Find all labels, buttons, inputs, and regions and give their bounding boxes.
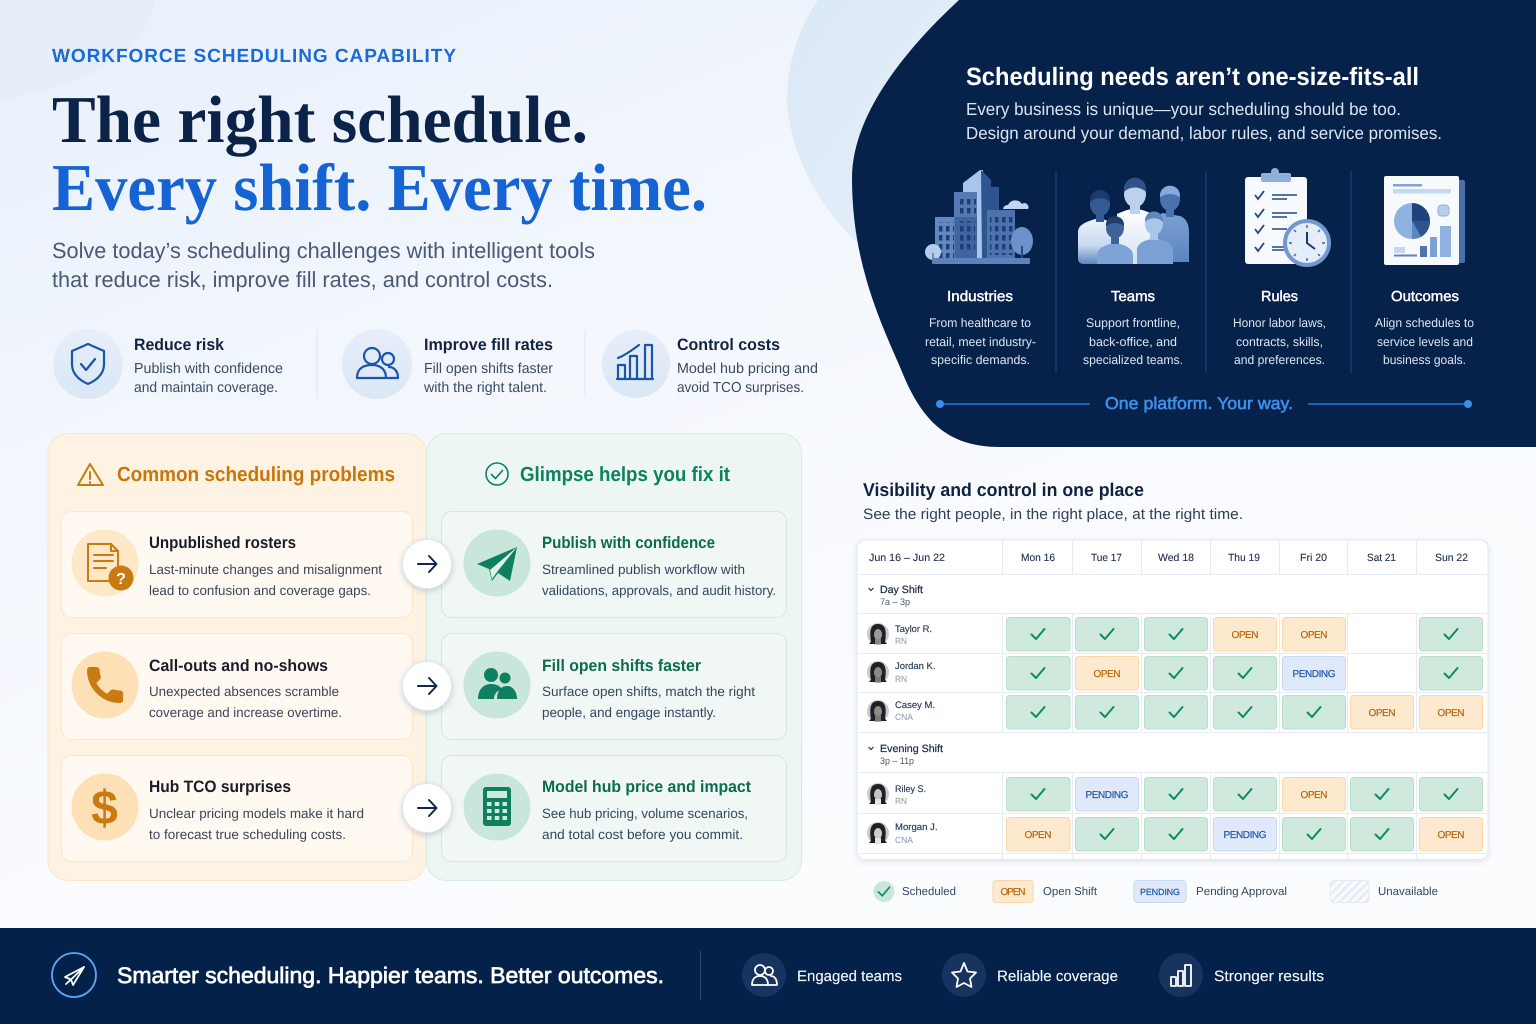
icon: paper plane in ring bbox=[52, 953, 96, 997]
legend: unavailable bbox=[1330, 880, 1438, 902]
row: Casey M. bbox=[867, 696, 1482, 729]
footer item: stronger results: Stronger results bbox=[1214, 968, 1324, 985]
card: publish with confidence: Streamlined publish workflow with bbox=[542, 562, 745, 577]
card: publish with confidence: validations, approvals, and audit history. bbox=[542, 583, 776, 598]
icon: check circle bbox=[486, 463, 508, 485]
subtitle bbox=[52, 238, 595, 292]
card: publish with confidence bbox=[442, 512, 786, 618]
text: outcomes description: business goals. bbox=[1383, 353, 1466, 367]
card: model hub price: Model hub price and impact bbox=[542, 778, 751, 796]
card: hub tco surprises: Unclear pricing models make it hard bbox=[149, 806, 364, 821]
card: model hub price bbox=[442, 756, 786, 862]
row: Taylor R.: OPEN bbox=[1232, 630, 1258, 641]
benefit: control costs: avoid TCO surprises. bbox=[677, 380, 804, 396]
icon: phone bbox=[72, 652, 138, 718]
legend: pending approval: Pending Approval bbox=[1196, 886, 1287, 898]
card: call-outs and no-shows bbox=[62, 634, 412, 740]
legend bbox=[874, 880, 1438, 902]
icon: people bbox=[464, 652, 530, 718]
table header: Sun 22 bbox=[1435, 552, 1468, 564]
table header: Sat 21 bbox=[1367, 552, 1396, 564]
heading: visibility and control: Visibility and control in one place bbox=[863, 479, 1144, 500]
row: Morgan J.: OPEN bbox=[1438, 830, 1464, 841]
row: Riley S. bbox=[867, 778, 1482, 811]
card: hub tco surprises: Hub TCO surprises bbox=[149, 778, 291, 796]
benefit: reduce risk: and maintain coverage. bbox=[134, 380, 278, 396]
column: rules bbox=[1233, 168, 1329, 367]
section: evening shift: 3p – 11p bbox=[880, 756, 914, 767]
text: scheduling needs intro bbox=[966, 99, 1442, 143]
legend: open shift bbox=[993, 880, 1098, 902]
heading: common problems: Common scheduling problems bbox=[117, 463, 395, 486]
benefit: control costs: Control costs bbox=[677, 336, 780, 354]
icon: calculator bbox=[464, 774, 530, 840]
avatar bbox=[867, 661, 889, 683]
heading: glimpse helps: Glimpse helps you fix it bbox=[520, 463, 730, 486]
avatar bbox=[867, 623, 889, 645]
row: Morgan J.: Morgan J. bbox=[895, 822, 938, 833]
icon: dollar sign bbox=[72, 774, 138, 840]
card: fill open shifts faster bbox=[442, 634, 786, 740]
icon: city buildings bbox=[925, 170, 1033, 264]
card: fill open shifts faster: people, and engage instantly. bbox=[542, 705, 716, 720]
row: Jordan K.: Jordan K. bbox=[895, 661, 936, 672]
card: unpublished rosters: lead to confusion and coverage gaps. bbox=[149, 583, 371, 598]
benefit: control costs: Model hub pricing and bbox=[677, 361, 818, 377]
icon: shield bbox=[53, 329, 123, 399]
card: unpublished rosters bbox=[62, 512, 412, 618]
row: Morgan J.: OPEN bbox=[1024, 830, 1052, 841]
section: day shift: 7a – 3p bbox=[880, 597, 910, 608]
icon: team group bbox=[1078, 178, 1189, 264]
table header: Fri 20 bbox=[1300, 552, 1327, 564]
section: day shift bbox=[868, 584, 923, 608]
row: Riley S.: PENDING bbox=[1086, 790, 1129, 801]
benefit: reduce risk: Publish with confidence bbox=[134, 361, 283, 377]
avatar bbox=[867, 700, 889, 722]
text: scheduling needs intro: Every business is unique—your scheduling should be too. bbox=[966, 99, 1401, 119]
column: outcomes bbox=[1375, 176, 1474, 367]
subtitle: Solve today’s scheduling challenges with intelligent tools bbox=[52, 238, 595, 263]
column: industries bbox=[925, 170, 1036, 367]
row: Jordan K.: PENDING bbox=[1292, 669, 1336, 680]
panel: dark hero blob bbox=[852, 0, 1536, 447]
icon: document with question mark: ? bbox=[116, 571, 126, 588]
text: rules description: Honor labor laws, bbox=[1233, 316, 1326, 330]
schedule table bbox=[857, 540, 1488, 860]
table header: Mon 16 bbox=[1021, 552, 1055, 564]
row: Casey M.: OPEN bbox=[1438, 708, 1464, 719]
table header: Thu 19 bbox=[1228, 552, 1260, 564]
row: Morgan J.: CNA bbox=[895, 835, 913, 845]
icon: warning triangle bbox=[78, 464, 103, 485]
benefit: improve fill rates: Improve fill rates bbox=[424, 336, 553, 354]
card: fill open shifts faster: Fill open shifts faster bbox=[542, 657, 702, 675]
table header: Wed 18 bbox=[1158, 552, 1194, 564]
row: Jordan K. bbox=[867, 656, 1482, 690]
arrow: problem to fix 1 bbox=[402, 540, 452, 588]
row: Taylor R. bbox=[867, 618, 1482, 651]
table header bbox=[869, 552, 1468, 564]
footer item: reliable coverage: Reliable coverage bbox=[997, 968, 1118, 985]
benefit: improve fill rates bbox=[342, 329, 553, 399]
row: Riley S.: OPEN bbox=[1300, 790, 1328, 801]
label: rules: Rules bbox=[1261, 289, 1298, 305]
avatar bbox=[867, 783, 889, 805]
legend: open shift: Open Shift bbox=[1043, 886, 1098, 898]
label: teams: Teams bbox=[1111, 289, 1155, 305]
row: Taylor R.: Taylor R. bbox=[895, 624, 932, 635]
row: Taylor R.: RN bbox=[895, 636, 907, 646]
row: Riley S.: Riley S. bbox=[895, 784, 926, 795]
card: model hub price: See hub pricing, volume scenarios, bbox=[542, 806, 748, 821]
footer item: reliable coverage bbox=[942, 953, 1118, 997]
section: day shift: Day Shift bbox=[880, 584, 923, 596]
icon: people bbox=[342, 329, 412, 399]
benefit: improve fill rates: Fill open shifts faster bbox=[424, 361, 553, 377]
card: call-outs and no-shows: coverage and increase overtime. bbox=[149, 705, 342, 720]
heading: scheduling needs: Scheduling needs aren’t one-size-fits-all bbox=[966, 63, 1419, 91]
row: Jordan K.: OPEN bbox=[1094, 669, 1120, 680]
icon: paper plane bbox=[464, 530, 530, 596]
panel: common scheduling problems bbox=[48, 434, 426, 880]
row: Morgan J.: PENDING bbox=[1224, 830, 1267, 841]
card: call-outs and no-shows: Unexpected absences scramble bbox=[149, 684, 339, 699]
table header: Tue 17 bbox=[1091, 552, 1122, 564]
section: evening shift: Evening Shift bbox=[880, 743, 943, 755]
footer tagline: Smarter scheduling. Happier teams. Better outcomes. bbox=[117, 963, 664, 988]
tagline: one platform bbox=[936, 394, 1472, 413]
legend: pending approval bbox=[1134, 880, 1287, 902]
table header: Jun 16 – Jun 22 bbox=[869, 552, 945, 564]
panel: glimpse fixes bbox=[426, 434, 802, 880]
text: teams description: back-office, and bbox=[1089, 335, 1177, 349]
card: model hub price: and total cost before you commit. bbox=[542, 827, 743, 842]
icon: document with question mark bbox=[72, 530, 138, 596]
icon: report with pie chart bbox=[1384, 176, 1465, 265]
card: call-outs and no-shows: Call-outs and no-shows bbox=[149, 657, 328, 675]
footer item: stronger results bbox=[1159, 953, 1324, 997]
text: rules description bbox=[1233, 316, 1326, 367]
title: The right schedule. bbox=[52, 83, 588, 157]
column: teams bbox=[1078, 178, 1189, 367]
card: hub tco surprises: to forecast true scheduling costs. bbox=[149, 827, 346, 842]
text: visibility subheading: See the right people, in the right place, at the right time. bbox=[863, 506, 1243, 523]
avatar bbox=[867, 822, 889, 844]
text: outcomes description: Align schedules to bbox=[1375, 316, 1474, 330]
text: scheduling needs intro: Design around your demand, labor rules, and service promises. bbox=[966, 123, 1442, 143]
benefit: control costs bbox=[602, 330, 818, 398]
eyebrow: WORKFORCE SCHEDULING CAPABILITY bbox=[52, 46, 456, 67]
row: Riley S.: RN bbox=[895, 796, 907, 806]
card: unpublished rosters: Unpublished rosters bbox=[149, 534, 296, 552]
title bbox=[52, 83, 707, 225]
footer item: engaged teams: Engaged teams bbox=[797, 968, 902, 985]
legend: scheduled bbox=[874, 881, 956, 902]
icon: dollar sign: $ bbox=[91, 782, 118, 835]
row: Casey M.: CNA bbox=[895, 712, 913, 722]
row: Taylor R.: OPEN bbox=[1300, 630, 1328, 641]
text: rules description: and preferences. bbox=[1234, 353, 1325, 367]
legend: open shift: OPEN bbox=[1000, 887, 1026, 898]
label: outcomes: Outcomes bbox=[1391, 289, 1459, 305]
text: industries description: retail, meet industry- bbox=[925, 335, 1036, 349]
card: unpublished rosters: Last-minute changes and misalignment bbox=[149, 562, 382, 577]
arrow: problem to fix 3 bbox=[402, 784, 452, 832]
section: evening shift bbox=[868, 743, 943, 767]
subtitle: that reduce risk, improve fill rates, and control costs. bbox=[52, 267, 553, 292]
label: industries: Industries bbox=[947, 289, 1013, 305]
text: teams description: Support frontline, bbox=[1086, 316, 1180, 330]
card: hub tco surprises bbox=[62, 756, 412, 862]
legend: unavailable: Unavailable bbox=[1378, 886, 1438, 898]
text: teams description bbox=[1083, 316, 1183, 367]
text: outcomes description bbox=[1375, 316, 1474, 367]
card: fill open shifts faster: Surface open shifts, match the right bbox=[542, 684, 755, 699]
row: Morgan J. bbox=[867, 818, 1482, 851]
card: publish with confidence: Publish with confidence bbox=[542, 534, 715, 552]
row: Casey M.: OPEN bbox=[1368, 708, 1396, 719]
text: industries description: specific demands. bbox=[931, 353, 1030, 367]
footer banner bbox=[0, 928, 1536, 1024]
benefit: reduce risk bbox=[53, 329, 283, 399]
legend: scheduled: Scheduled bbox=[902, 886, 956, 898]
legend: pending approval: PENDING bbox=[1140, 887, 1180, 897]
tagline: one platform: One platform. Your way. bbox=[1105, 394, 1293, 413]
row: Jordan K.: RN bbox=[895, 674, 907, 684]
benefit: improve fill rates: with the right talent. bbox=[423, 380, 547, 396]
title: Every shift. Every time. bbox=[52, 151, 707, 225]
benefit: reduce risk: Reduce risk bbox=[134, 336, 225, 354]
arrow: problem to fix 2 bbox=[402, 662, 452, 710]
icon: clipboard with clock bbox=[1245, 168, 1329, 265]
text: rules description: contracts, skills, bbox=[1236, 335, 1323, 349]
text: teams description: specialized teams. bbox=[1083, 353, 1183, 367]
icon: bar chart bbox=[602, 330, 670, 398]
text: industries description: From healthcare to bbox=[929, 316, 1031, 330]
text: industries description bbox=[925, 316, 1036, 367]
row: Casey M.: Casey M. bbox=[895, 700, 935, 711]
footer item: engaged teams bbox=[742, 953, 902, 997]
text: outcomes description: service levels and bbox=[1377, 335, 1473, 349]
